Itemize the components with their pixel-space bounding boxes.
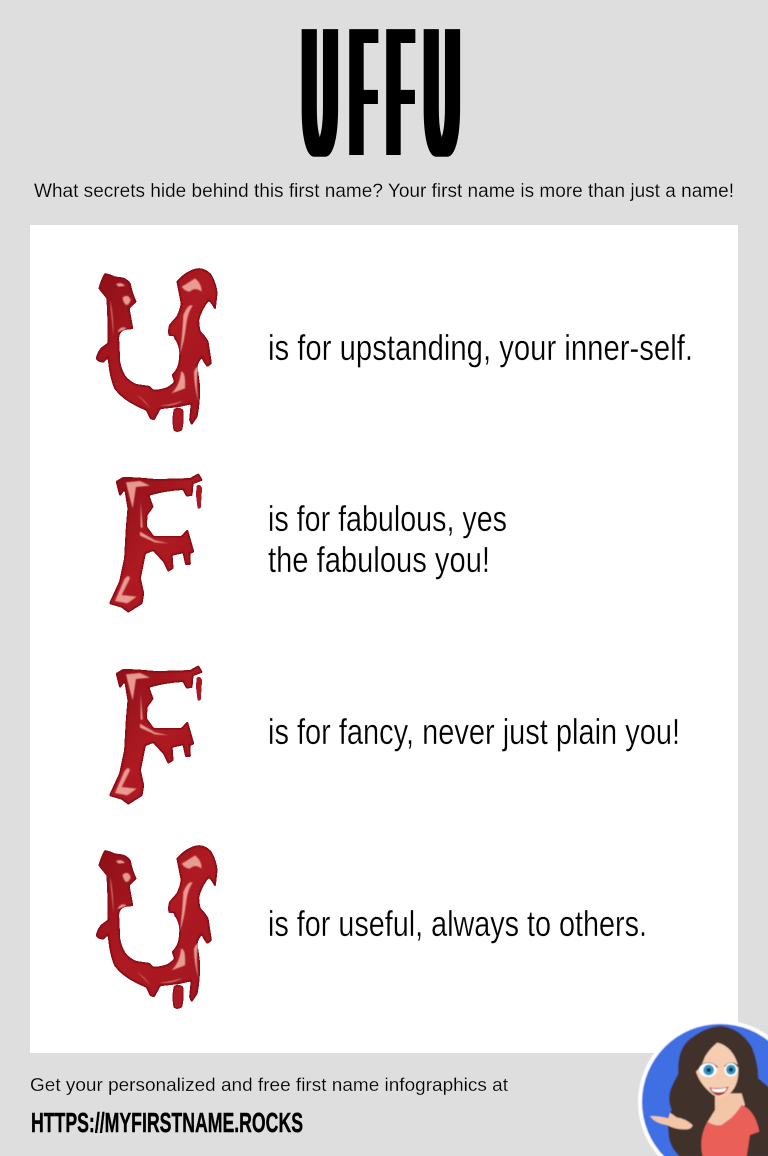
- avatar eyes: [699, 1063, 738, 1077]
- avatar hand: [650, 1113, 693, 1129]
- avatar face: [696, 1043, 738, 1097]
- text: F fancy: is for fancy, never just plain you!: [268, 711, 680, 752]
- title: [304, 0, 458, 195]
- icon: blood letter U: [97, 269, 217, 431]
- text: F fabulous: the fabulous you!: [268, 539, 490, 580]
- avatar shirt: [701, 1105, 759, 1156]
- subtitle: What secrets hide behind this first name? Your first name is more than just a name!: [34, 180, 734, 202]
- text: F fabulous: is for fabulous, yes: [268, 498, 507, 539]
- icon: blood letter U second: [97, 846, 217, 1008]
- text: U useful: is for useful, always to others.: [268, 903, 647, 944]
- footer text: Get your personalized and free first name infographics at: [30, 1074, 508, 1095]
- footer url: HTTPS://MYFIRSTNAME.ROCKS: [31, 1107, 303, 1138]
- icon: blood letter F: [110, 474, 202, 612]
- avatar hair: [668, 1026, 768, 1156]
- icon: blood letter F second: [110, 666, 202, 804]
- avatar: [638, 1020, 768, 1156]
- text: F fabulous: [268, 498, 507, 580]
- panel: letters: [30, 225, 738, 1053]
- avatar mouth: [709, 1087, 729, 1095]
- avatar neck and chest: [707, 1093, 745, 1128]
